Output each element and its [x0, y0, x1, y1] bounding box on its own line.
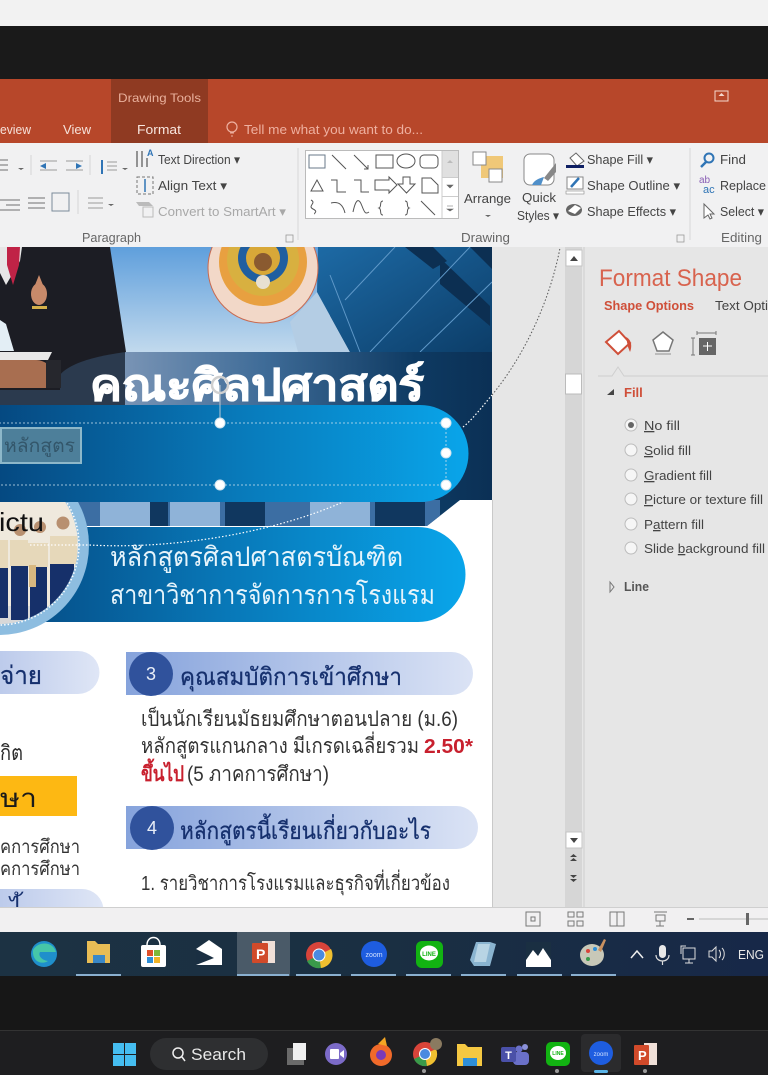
powerpoint: [252, 941, 275, 963]
photos: [526, 942, 551, 967]
dotted motion path: [30, 395, 492, 546]
zoom: zoom: [594, 1052, 608, 1058]
arrange button: Arrange: [464, 191, 511, 206]
building strip: [70, 500, 440, 527]
arrange button: [464, 152, 511, 217]
empty textbox label: [1, 428, 81, 463]
line: [416, 941, 443, 968]
fill section: No fill: [644, 418, 680, 433]
fill section: Picture or texture fill: [644, 492, 763, 507]
format shape pane: [598, 265, 768, 594]
pane tab icons: [606, 331, 716, 355]
shape fill, outline, effects: Shape Effects ▾: [587, 204, 676, 219]
chrome: [306, 942, 333, 968]
empty textbox label: หลักสูตร: [4, 436, 75, 457]
pane title: Format Shape: [599, 265, 742, 292]
firefox: [370, 1037, 392, 1066]
paragraph group: Paragraph: [82, 231, 141, 245]
ribbon tab bar: View: [63, 122, 92, 137]
fill section: [607, 385, 765, 556]
next left header cropped: [0, 889, 104, 907]
mail: [196, 940, 222, 965]
tray: [631, 945, 764, 965]
editing group: Replace: [720, 178, 766, 193]
shape fill, outline, effects: [566, 152, 684, 242]
drawing shapes gallery: [306, 150, 510, 245]
line section: [610, 579, 649, 594]
section 4: หลักสูตรนี้เรียนเกี่ยวกับอะไร: [180, 813, 431, 846]
shape fill, outline, effects: Shape Outline ▾: [587, 178, 680, 193]
section 3 body: 2.50*: [424, 736, 473, 758]
line: [546, 1042, 570, 1066]
paragraph group: Convert to SmartArt ▾: [158, 204, 286, 219]
search box: Search: [191, 1045, 246, 1064]
fill section: Fill: [624, 385, 643, 400]
format shape pane: Text Opti: [715, 298, 768, 313]
quick styles button: Styles ▾: [517, 208, 559, 223]
yellow highlight box: [0, 776, 77, 816]
chrome: [413, 1038, 442, 1066]
fill section: Gradient fill: [644, 468, 712, 483]
shape fill, outline, effects: Shape Fill ▾: [587, 152, 653, 167]
format shape pane: Shape Options: [604, 298, 694, 313]
paragraph group: Align Text ▾: [158, 178, 227, 193]
paragraph group: A: [147, 148, 154, 158]
editing group: Select ▾: [720, 204, 764, 219]
paragraph group: [0, 148, 293, 245]
teams: [501, 1044, 529, 1065]
program name pill: [0, 527, 466, 622]
line section: Line: [624, 579, 649, 594]
underlines: [76, 974, 616, 977]
status bar: [0, 907, 768, 932]
left column semester lines: คการศึกษา: [0, 859, 80, 880]
notepad: [470, 942, 496, 966]
editing group: ab: [699, 175, 711, 186]
zoom: [581, 1034, 621, 1073]
section 3 body: เป็นนักเรียนมัธยมศึกษาตอนปลาย (ม.6): [141, 705, 458, 731]
ribbon tab bar: Format: [137, 122, 181, 137]
fill section: Slide background fill: [644, 541, 765, 556]
person in suit: [0, 247, 126, 405]
ribbon tab bar: Tell me what you want to do...: [244, 122, 423, 137]
line: LINE: [552, 1051, 564, 1057]
zoom: [361, 941, 387, 967]
start button: [113, 1043, 136, 1066]
black bezel: [0, 976, 768, 1030]
powerpoint: P: [638, 1048, 647, 1063]
selection handles: [0, 377, 451, 490]
university seal: [208, 247, 318, 324]
yellow highlight box: ษา: [0, 783, 37, 813]
section 4: 4: [147, 818, 157, 838]
vertical scrollbar: [565, 247, 582, 907]
fill section: Solid fill: [644, 443, 691, 458]
section 3: คุณสมบัติการเข้าศึกษา: [180, 664, 402, 692]
task view: [287, 1043, 306, 1065]
next left header cropped: ไ้: [8, 891, 24, 924]
hero photo header: [78, 247, 492, 526]
section 3 body: (5 ภาคการศึกษา): [187, 763, 329, 786]
slide: [0, 213, 492, 932]
circular student photo: [0, 502, 89, 635]
tray: ENG: [738, 947, 764, 962]
browser top strip: [0, 0, 768, 26]
section 2 header cropped: [0, 651, 99, 694]
section 3 body: [141, 705, 473, 786]
section 3 body: หลักสูตรแกนกลาง มีเกรดเฉลี่ยรวม: [141, 731, 419, 759]
store: [141, 938, 166, 967]
left column semester lines: คการศึกษา: [0, 837, 80, 858]
clipchamp: [325, 1043, 347, 1065]
drawing shapes gallery: Drawing: [461, 231, 510, 245]
faculty title: คณะศิลปศาสตร์: [90, 361, 424, 410]
quick styles button: [517, 154, 559, 223]
old taskbar: [0, 932, 768, 977]
zoom: zoom: [365, 952, 383, 959]
editing group: Editing: [721, 231, 762, 245]
slide edge: [492, 500, 494, 907]
fill section: Pattern fill: [644, 517, 704, 532]
quick styles button: Quick: [522, 190, 557, 205]
paragraph group: Text Direction ▾: [158, 152, 240, 167]
program name pill: หลักสูตรศิลปศาสตรบัณฑิต: [110, 542, 403, 573]
section 4 list: 1. รายวิชาการโรงแรมและธุรกิจที่เกี่ยวข้อง: [141, 869, 450, 896]
powerpoint: P: [256, 946, 265, 962]
blue banner pill with selection: [0, 377, 468, 502]
ribbon tab bar: eview: [0, 122, 32, 137]
running dots: [422, 1069, 647, 1073]
section 3 body: ขึ้นไป: [141, 758, 184, 786]
workspace background: [0, 247, 768, 907]
ribbon tab bar: Drawing Tools: [118, 91, 201, 105]
explorer: [457, 1044, 482, 1066]
section 3: [126, 652, 473, 786]
dark screen margin: [0, 26, 768, 79]
explorer: [87, 941, 110, 963]
ribbon body: [0, 143, 768, 247]
section 4: [126, 806, 478, 896]
edge: [31, 941, 57, 967]
program name pill: สาขาวิชาการจัดการการโรงแรม: [110, 580, 435, 610]
left column semester lines: [1, 838, 78, 875]
editing group: [699, 152, 766, 245]
circular student photo: ictu: [0, 507, 44, 537]
editing group: Find: [720, 152, 746, 167]
paint: [580, 939, 606, 966]
section 3: 3: [146, 664, 156, 684]
ribbon tab bar: [0, 79, 768, 143]
windows 11 taskbar: [0, 1030, 768, 1075]
left column text fragment: กิต: [0, 742, 23, 765]
section 2 header cropped: จ่าย: [0, 662, 42, 690]
line: LINE: [422, 952, 436, 958]
title band: [110, 352, 492, 500]
teams: T: [505, 1050, 512, 1062]
search box: [150, 1038, 268, 1070]
powerpoint: [634, 1043, 657, 1065]
editing group: ac: [703, 184, 715, 196]
